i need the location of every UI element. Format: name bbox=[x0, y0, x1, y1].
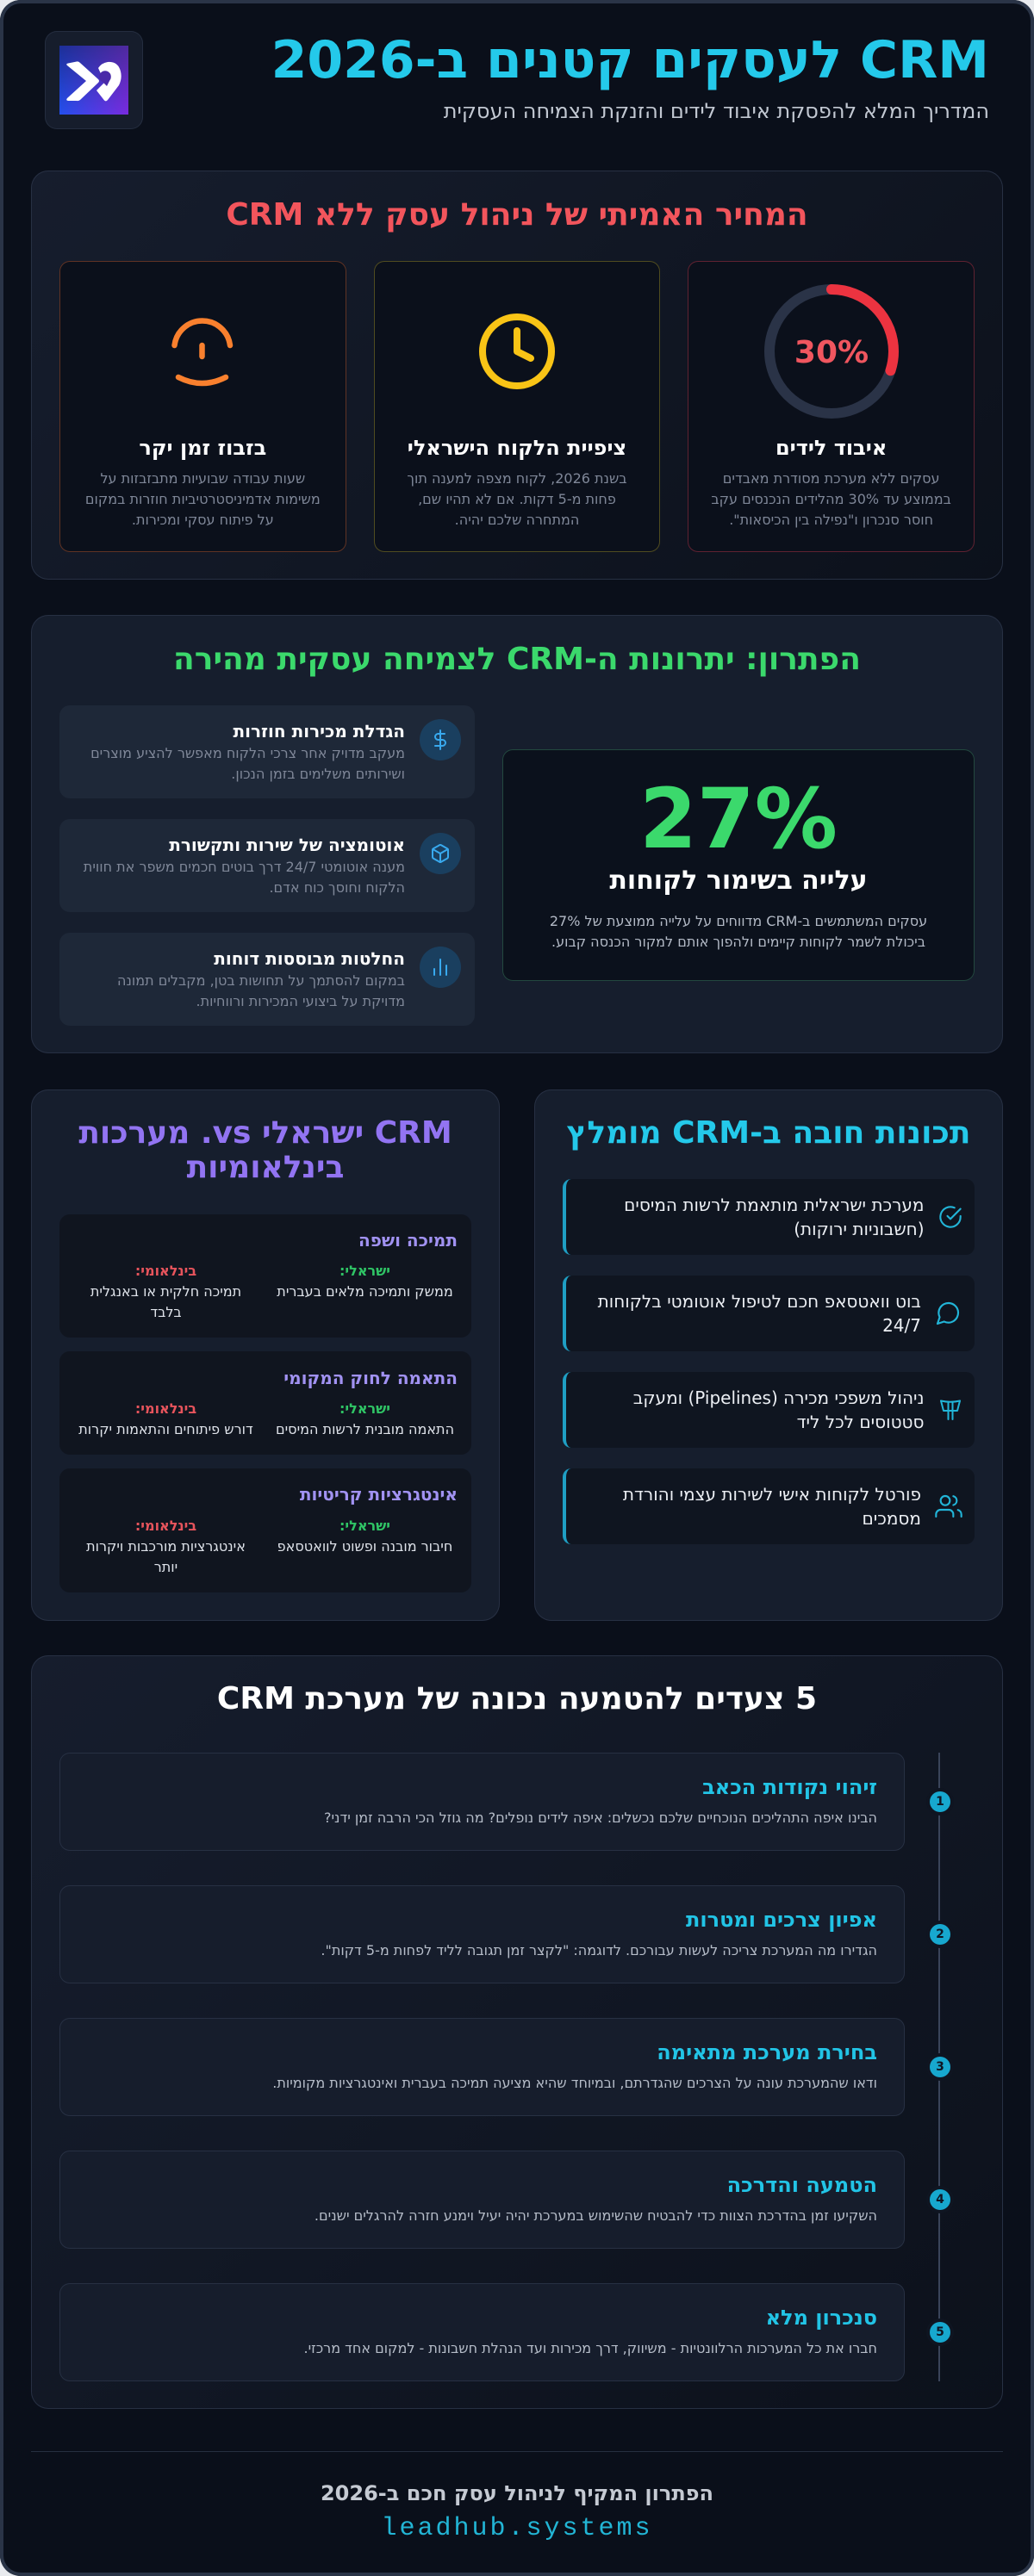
step text: חברו את כל המערכות הרלוונטיות - משיווק, דרך מכירות ועד הנהלת חשבונות - למקום אחד מרכזי. bbox=[304, 2340, 877, 2356]
israeli column: ישראלי: bbox=[339, 1400, 390, 1417]
step title: בחירת מערכת מתאימה bbox=[657, 2040, 877, 2064]
benefit: automation bbox=[59, 819, 475, 912]
step 3 card bbox=[59, 2018, 905, 2116]
card text: שעות עבודה שבועיות מתבזבזות על bbox=[100, 470, 305, 487]
card title: ציפיית הלקוח הישראלי bbox=[408, 436, 626, 460]
feature text: 24/7 bbox=[882, 1315, 921, 1336]
heading: comparison bbox=[78, 1115, 452, 1185]
step text: ודאו שהמערכת עונה על הצרכים שהגדרתם, ובמיוחד שהיא מציעה תמיכה בעברית ואינטגרציות מקומיות. bbox=[272, 2075, 877, 2091]
benefit: data-based decisions bbox=[59, 933, 475, 1026]
icon: funnel bbox=[940, 1400, 961, 1420]
step title: זיהוי נקודות הכאב bbox=[702, 1775, 877, 1799]
header logo tile bbox=[45, 31, 143, 129]
card: customer expectation bbox=[374, 261, 660, 552]
card: lead loss bbox=[688, 261, 975, 552]
step text: הבינו איפה התהליכים הנוכחיים שלכם נכשלים: איפה לידים נופלים? מה גוזל הכי הרבה זמן ידני? bbox=[324, 1809, 877, 1826]
timeline line bbox=[938, 1753, 940, 2381]
big number: 27% bbox=[639, 771, 838, 867]
step 4 marker bbox=[930, 2189, 950, 2210]
international column bbox=[78, 1400, 253, 1437]
row title: תמיכה ושפה bbox=[358, 1230, 458, 1251]
benefit title: החלטות מבוססות דוחות bbox=[214, 948, 405, 969]
panel: must-have features bbox=[534, 1089, 1003, 1621]
heading: solution: הפתרון: יתרונות ה-CRM לצמיחה עסקית מהירה bbox=[173, 642, 861, 677]
icon: users bbox=[935, 1495, 962, 1518]
comparison row: support and language bbox=[59, 1214, 471, 1338]
israeli column bbox=[277, 1263, 453, 1300]
feature text: מערכת ישראלית מותאמת לרשות המיסים bbox=[624, 1195, 924, 1215]
card: wasted time bbox=[59, 261, 346, 552]
step text: הגדירו מה המערכת צריכה לעשות עבורכם. לדוגמה: "לקצר זמן תגובה לליד לפחות מ-5 דקות". bbox=[321, 1942, 877, 1958]
israeli column bbox=[277, 1518, 452, 1555]
stat text: עסקים המשתמשים ב-CRM מדווחים על עלייה ממוצעת של 27% bbox=[550, 913, 927, 929]
heading: features: תכונות חובה ב-CRM מומלץ bbox=[567, 1115, 970, 1151]
feature text bbox=[623, 1484, 921, 1529]
stat label: עלייה בשימור לקוחות bbox=[609, 865, 868, 896]
step 3 marker: 3 bbox=[936, 2060, 944, 2074]
title: CRM לעסקים קטנים ב-2026 bbox=[271, 30, 989, 90]
feature: whatsapp bot bbox=[563, 1276, 975, 1351]
israeli column: חיבור מובנה ופשוט לוואטסאפ bbox=[277, 1538, 452, 1555]
feature: tax authority bbox=[563, 1179, 975, 1255]
chart: 30 percent ring bbox=[764, 284, 899, 419]
feature text bbox=[633, 1387, 924, 1432]
benefit text: מענה אוטומטי 24/7 דרך בוטים חכמים משפר את חווית bbox=[84, 859, 405, 875]
international column: בלבד bbox=[150, 1304, 182, 1320]
step 3 marker bbox=[930, 2057, 950, 2077]
step 1 marker bbox=[930, 1791, 950, 1812]
benefit text: מעקב מדויק אחר צרכי הלקוח מאפשר להציע מוצרים bbox=[90, 745, 405, 761]
row title: התאמה לחוק המקומי bbox=[283, 1368, 458, 1388]
international column bbox=[90, 1263, 241, 1320]
subtitle: המדריך המלא להפסקת איבוד לידים והזנקת הצמיחה העסקית bbox=[444, 99, 989, 123]
israeli column: ישראלי: bbox=[339, 1263, 390, 1279]
feature: pipelines bbox=[563, 1372, 975, 1448]
icon: clock bbox=[479, 313, 555, 389]
feature: customer portal bbox=[563, 1468, 975, 1544]
feature text: (חשבוניות ירוקות) bbox=[794, 1219, 924, 1239]
icon: check circle bbox=[939, 1206, 962, 1228]
footer tagline: הפתרון המקיף לניהול עסק חכם ב-2026 bbox=[321, 2481, 713, 2505]
step text: השקיעו זמן בהדרכת הצוות כדי להבטיח שהשימוש במערכת יהיה יעיל וימנע חזרה להרגלים ישנים. bbox=[315, 2207, 877, 2224]
card text bbox=[711, 470, 951, 528]
card text: חוסר סנכרון ו"נפילה בין הכיסאות". bbox=[729, 512, 933, 528]
benefit title: הגדלת מכירות חוזרות bbox=[233, 721, 405, 742]
step 1 card bbox=[59, 1753, 905, 1851]
card text: פחות מ-5 דקות. אם לא תהיו שם, bbox=[418, 491, 616, 507]
icon: logo mark bbox=[59, 46, 128, 115]
stat card: 27 percent bbox=[502, 749, 975, 981]
step title: סנכרון מלא bbox=[766, 2306, 877, 2330]
benefit: recurring sales bbox=[59, 705, 475, 798]
step 5 card bbox=[59, 2283, 905, 2381]
panel: five implementation steps bbox=[31, 1655, 1003, 2409]
panel: the true cost of no CRM bbox=[31, 171, 1003, 580]
card text: המתחרה שלכם יהיה. bbox=[455, 512, 579, 528]
comparison row: local law bbox=[59, 1351, 471, 1455]
card text: על פיתוח עסקי ומכירות. bbox=[132, 512, 274, 528]
israeli column: התאמה מובנית לרשות המיסים bbox=[276, 1421, 454, 1437]
card text bbox=[407, 470, 627, 528]
step 2 marker: 2 bbox=[936, 1927, 944, 1941]
feature text bbox=[598, 1291, 921, 1336]
step 1 marker: 1 bbox=[936, 1795, 944, 1809]
panel: Israeli vs international CRM bbox=[31, 1089, 500, 1621]
feature text: מסמכים bbox=[863, 1508, 921, 1529]
comparison row: integrations bbox=[59, 1468, 471, 1592]
card text bbox=[85, 470, 321, 528]
icon: bars bbox=[420, 947, 461, 988]
benefit text bbox=[117, 972, 405, 1009]
international column: דורש פיתוחים והתאמות יקרות bbox=[78, 1421, 253, 1437]
panel: the solution bbox=[31, 615, 1003, 1053]
step 2 marker bbox=[930, 1924, 950, 1945]
israeli column: ממשק ותמיכה מלאים בעברית bbox=[277, 1283, 453, 1300]
card text: עסקים ללא מערכת מסודרת מאבדים bbox=[723, 470, 939, 487]
step 4 marker: 4 bbox=[936, 2193, 944, 2207]
heading: comparison: בינלאומיות bbox=[187, 1150, 344, 1185]
international column bbox=[86, 1518, 246, 1575]
card text: בשנת 2026, לקוח מצפה למענה תוך bbox=[407, 470, 627, 487]
chart: 30 percent ring: 30% bbox=[794, 335, 869, 370]
international column: בינלאומי: bbox=[135, 1518, 196, 1534]
stat text: ביכולת לשמר לקוחות קיימים ולהפוך אותם למקור הכנסה קבוע. bbox=[551, 934, 925, 950]
icon: box bbox=[420, 833, 461, 874]
heading: comparison: CRM ישראלי vs. מערכות bbox=[78, 1115, 452, 1151]
feature text: ניהול משפכי מכירה (Pipelines) ומעקב bbox=[633, 1387, 924, 1408]
stat text bbox=[550, 913, 927, 950]
step title: אפיון צרכים ומטרות bbox=[686, 1908, 877, 1932]
benefit title: אוטומציה של שירות ותקשורת bbox=[169, 835, 405, 855]
row title: אינטגרציות קריטיות bbox=[300, 1483, 458, 1504]
benefit text: ושירותים משלימים בזמן הנכון. bbox=[231, 766, 405, 782]
icon: dollar bbox=[420, 719, 461, 760]
step 5 marker: 5 bbox=[936, 2325, 944, 2339]
benefit text bbox=[83, 859, 405, 896]
heading: steps: 5 צעדים להטמעה נכונה של מערכת CRM bbox=[217, 1681, 817, 1716]
benefit text: הלקוח וחוסך כוח אדם. bbox=[269, 879, 405, 896]
feature text: סטטוסים לכל ליד bbox=[797, 1412, 924, 1432]
international column: יותר bbox=[154, 1559, 178, 1575]
card title: איבוד לידים bbox=[776, 436, 887, 460]
international column: בינלאומי: bbox=[135, 1263, 196, 1279]
international column: אינטגרציות מורכבות ויקרות bbox=[86, 1538, 246, 1555]
feature text: פורטל לקוחות אישי לשירות עצמי והורדת bbox=[623, 1484, 921, 1505]
card title: בזבוז זמן יקר bbox=[139, 436, 266, 460]
benefit text: במקום להסתמך על תחושות בטן, מקבלים תמונה bbox=[117, 972, 405, 989]
step 2 card bbox=[59, 1885, 905, 1983]
benefit text: מדויקת על ביצועי המכירות ורווחיות. bbox=[196, 993, 405, 1009]
feature text: בוט וואטסאפ חכם לטיפול אוטומטי בלקוחות bbox=[598, 1291, 921, 1312]
international column: בינלאומי: bbox=[135, 1400, 196, 1417]
step 4 card bbox=[59, 2151, 905, 2249]
step title: הטמעה והדרכה bbox=[727, 2173, 877, 2197]
heading: true cost: המחיר האמיתי של ניהול עסק ללא CRM bbox=[226, 197, 808, 233]
icon: gauge arcs bbox=[171, 318, 233, 386]
israeli column bbox=[276, 1400, 454, 1437]
international column: תמיכה חלקית או באנגלית bbox=[90, 1283, 241, 1300]
step 5 marker bbox=[930, 2322, 950, 2343]
benefit text bbox=[90, 745, 405, 782]
israeli column: ישראלי: bbox=[339, 1518, 390, 1534]
icon: message bubble bbox=[936, 1302, 960, 1325]
feature text bbox=[624, 1195, 924, 1239]
card text: משימות אדמיניסטרטיביות חוזרות במקום bbox=[85, 491, 321, 507]
footer website: leadhub.systems bbox=[381, 2514, 653, 2543]
card text: בממוצע עד 30% מהלידים הנכנסים עקב bbox=[711, 491, 951, 507]
